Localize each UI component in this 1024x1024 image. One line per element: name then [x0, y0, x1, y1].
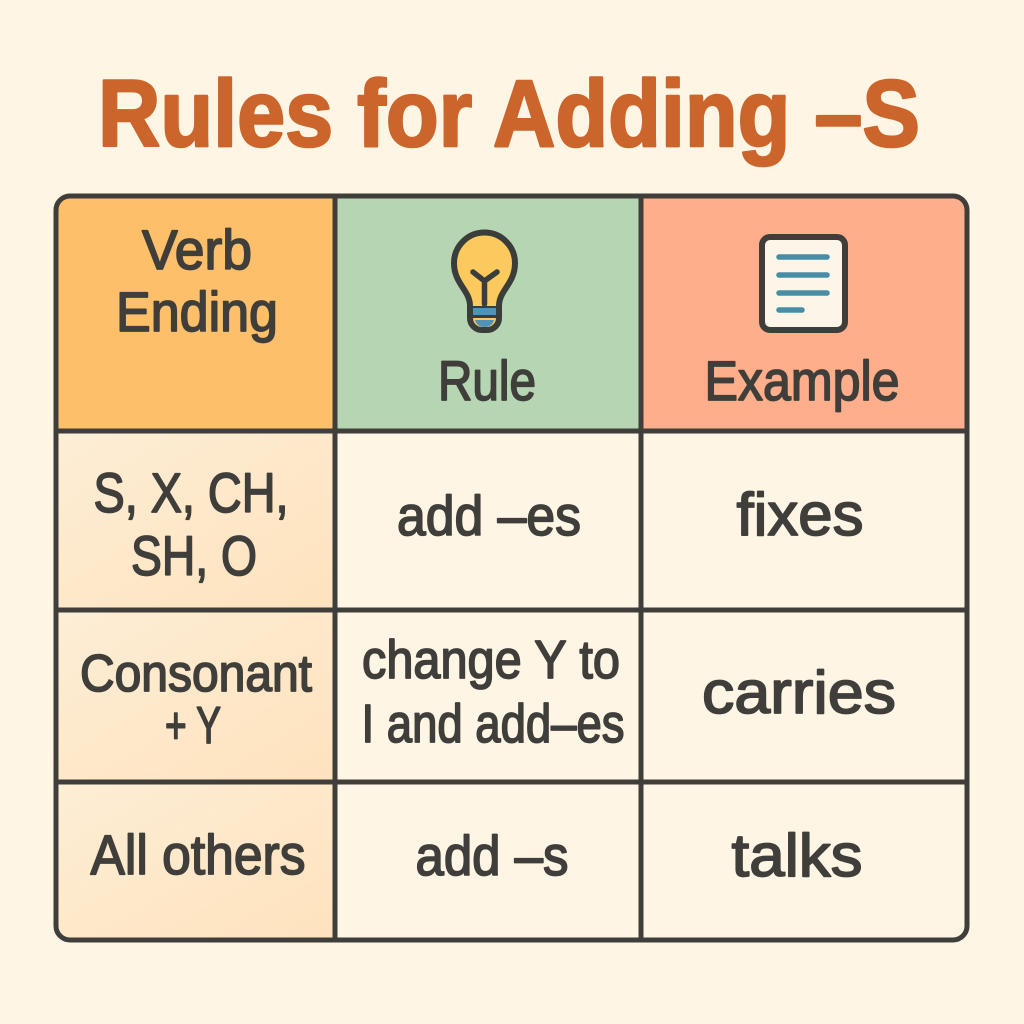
header cell: example: Example	[704, 349, 900, 412]
row 3: add –s	[416, 824, 568, 887]
title: Rules for Adding –S	[98, 61, 920, 167]
row 1: SH, O	[131, 524, 257, 587]
table grid lines	[56, 196, 967, 940]
row 2: I and add–es	[362, 694, 624, 754]
row 3	[56, 782, 862, 940]
row 1: S, X, CH,	[94, 461, 288, 524]
header cell: verb ending: Ending	[116, 280, 278, 343]
header cell: rule	[335, 196, 641, 431]
row 1	[56, 431, 864, 610]
row 2: carries	[702, 659, 896, 726]
row 1: add –es	[397, 484, 581, 547]
row 2: Consonant	[80, 645, 312, 703]
row 2: change Y to	[362, 630, 620, 690]
icon: document	[762, 237, 845, 330]
row 2: + Y	[165, 697, 221, 755]
row 2	[56, 610, 896, 782]
header cell: example	[641, 196, 968, 431]
row 3: talks	[732, 822, 862, 889]
header cell: rule: Rule	[438, 349, 536, 412]
table	[56, 196, 968, 940]
row 3: All others	[90, 823, 306, 886]
icon: light bulb	[454, 233, 515, 330]
header cell: verb ending	[56, 196, 335, 431]
header cell: verb ending: Verb	[142, 218, 252, 281]
row 1: fixes	[736, 481, 864, 548]
